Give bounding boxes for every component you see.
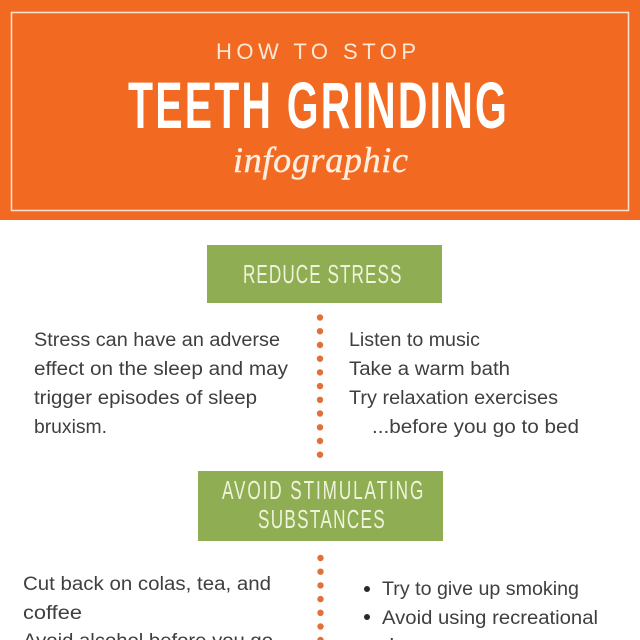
text block: stress explanation: effect on the sleep and may	[34, 359, 289, 380]
text block: stress explanation: bruxism.	[34, 417, 107, 438]
text block: bedtime activities: ...before you go to bed	[372, 417, 579, 438]
text block: bedtime activities: Take a warm bath	[349, 359, 510, 380]
subtitle: infographic	[233, 140, 408, 180]
text block: reduce stimulants: Cut back on colas, tea, and	[23, 574, 271, 595]
text block: bedtime activities: Listen to music	[349, 330, 480, 351]
section heading: avoid stimulating substances: AVOID STIMULATING	[222, 475, 423, 505]
section heading: reduce stress: REDUCE STRESS	[243, 259, 401, 289]
bullet list: smoking and drugs: Avoid using recreational	[382, 608, 598, 629]
section heading: avoid stimulating substances	[198, 471, 443, 541]
text block: reduce stimulants	[23, 574, 273, 640]
text block: bedtime activities: Try relaxation exercises	[349, 388, 558, 409]
bullet list: smoking and drugs: Try to give up smoking	[382, 579, 579, 600]
text block: stress explanation: Stress can have an adverse	[34, 330, 280, 351]
text block: stress explanation	[34, 330, 289, 438]
dotted divider: second section	[317, 555, 324, 640]
section heading: avoid stimulating substances: SUBSTANCES	[258, 504, 385, 534]
header banner	[0, 0, 640, 220]
text block: reduce stimulants: coffee	[23, 603, 82, 624]
section heading: reduce stress	[207, 245, 442, 303]
bullet list: smoking and drugs	[364, 579, 598, 640]
main title: TEETH GRINDING	[128, 68, 507, 142]
pre-title: HOW TO STOP	[216, 39, 416, 64]
text block: stress explanation: trigger episodes of sleep	[34, 388, 257, 409]
text block: bedtime activities	[349, 330, 579, 438]
dotted divider: first section	[317, 314, 323, 458]
